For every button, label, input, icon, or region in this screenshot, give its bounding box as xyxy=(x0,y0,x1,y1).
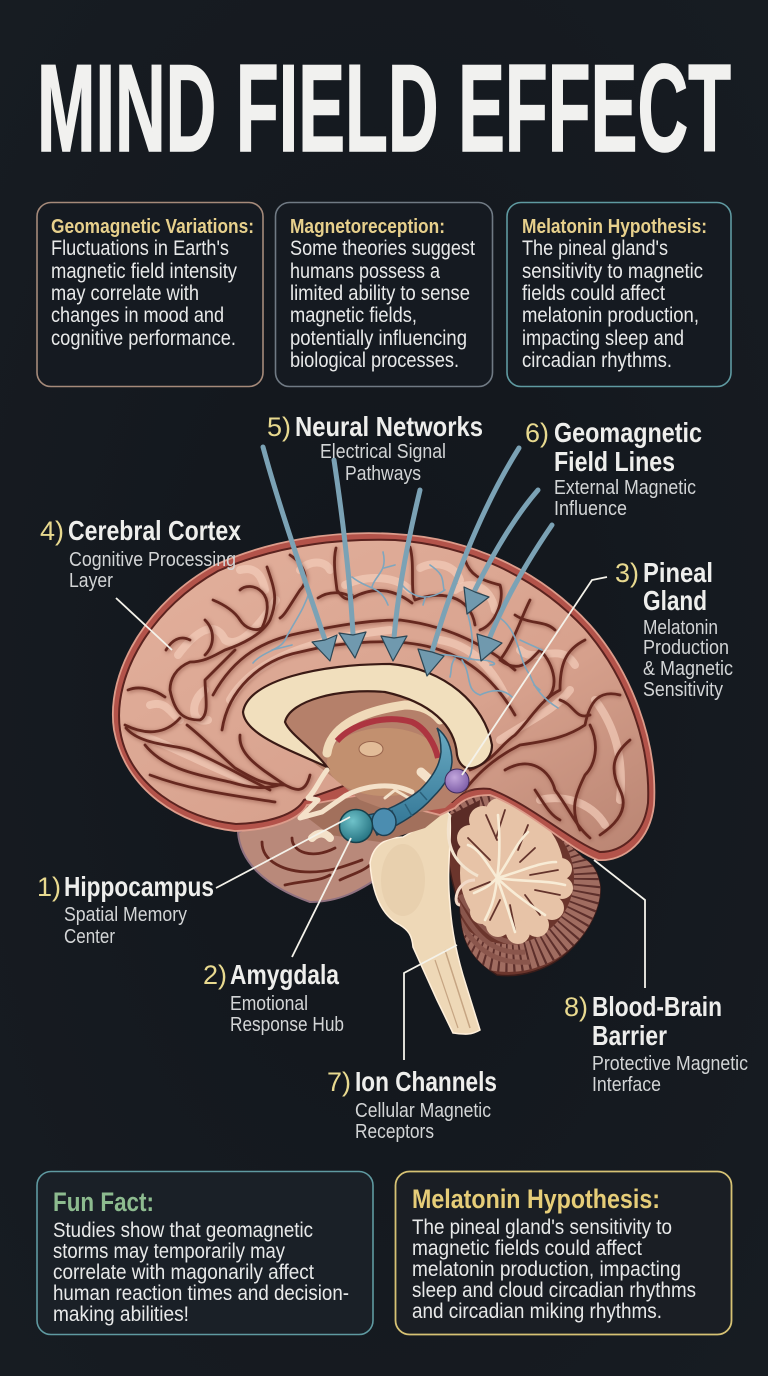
panel body: magnetoreception: Some theories suggest xyxy=(290,237,475,260)
panel heading: melatonin hypothesis top: Melatonin Hypothesis: xyxy=(522,215,707,238)
label 2: amygdala: Response Hub xyxy=(230,1014,344,1036)
label 8: blood-brain barrier: Blood-Brain xyxy=(592,991,722,1022)
panel body: geomagnetic variations xyxy=(51,237,237,350)
panel body: magnetoreception: biological processes. xyxy=(290,349,459,372)
leader line 7 xyxy=(404,945,457,1060)
neural branch lines xyxy=(253,552,558,708)
temporal lobe xyxy=(238,800,392,902)
panel body: melatonin hypothesis bottom: sleep and cloud circadian rhythms xyxy=(412,1279,696,1302)
label 6: geomagnetic field lines xyxy=(525,417,702,520)
label 4: cerebral cortex: Cerebral Cortex xyxy=(68,515,241,546)
panel: melatonin hypothesis top xyxy=(507,202,731,386)
panel body: melatonin hypothesis top: sensitivity to magnetic xyxy=(522,260,703,283)
panel body: fun fact: storms may temporarily may xyxy=(53,1240,285,1263)
leader line 8 xyxy=(594,860,645,988)
label 6: geomagnetic field lines: Geomagnetic xyxy=(554,417,702,448)
panel body: geomagnetic variations: cognitive performance. xyxy=(51,327,236,350)
leader line 2 xyxy=(292,838,351,957)
label 1: hippocampus: 1) xyxy=(37,872,61,902)
arrow 3 xyxy=(381,490,420,661)
label 8: blood-brain barrier: Protective Magnetic xyxy=(592,1053,748,1075)
panel body: melatonin hypothesis bottom: melatonin production, impacting xyxy=(412,1258,681,1281)
arbor vitae xyxy=(457,798,573,944)
panel body: fun fact: making abilities! xyxy=(53,1303,189,1326)
label 8: blood-brain barrier: 8) xyxy=(564,992,588,1022)
corpus callosum xyxy=(243,664,492,768)
panel body: melatonin hypothesis bottom: magnetic fields could affect xyxy=(412,1237,642,1260)
label 4: cerebral cortex: 4) xyxy=(40,516,64,546)
label 3: pineal gland: Sensitivity xyxy=(643,679,723,701)
label 3: pineal gland: Gland xyxy=(643,585,707,616)
panel body: magnetoreception xyxy=(290,237,475,372)
panel: magnetoreception xyxy=(276,202,492,386)
arrow 1 xyxy=(263,447,337,661)
panel body: melatonin hypothesis top: melatonin production, xyxy=(522,304,699,327)
label 3: pineal gland: & Magnetic xyxy=(643,658,733,680)
label 2: amygdala: Emotional xyxy=(230,993,308,1015)
label 6: geomagnetic field lines: External Magnetic xyxy=(554,477,696,499)
label 1: hippocampus: Center xyxy=(64,926,115,948)
label 1: hippocampus: Spatial Memory xyxy=(64,904,187,926)
cerebellum ribs xyxy=(428,798,588,962)
thalamus oval xyxy=(359,742,383,756)
arrows: geomagnetic field lines xyxy=(263,447,552,676)
panel body: melatonin hypothesis top: fields could affect xyxy=(522,282,665,305)
dark cavity beside arbor xyxy=(450,800,480,876)
panel body: magnetoreception: magnetic fields, xyxy=(290,304,417,327)
arrow 6 xyxy=(477,525,552,661)
inner brown region xyxy=(262,675,466,815)
arrow 2 xyxy=(334,460,366,658)
panel body: melatonin hypothesis bottom: and circadian miking rhythms. xyxy=(412,1300,662,1323)
panel body: geomagnetic variations: may correlate with xyxy=(51,282,199,305)
panel body: magnetoreception: humans possess a xyxy=(290,260,440,283)
label 4: cerebral cortex: Layer xyxy=(69,570,113,592)
arrow 5 xyxy=(464,490,538,614)
panel heading: fun fact: Fun Fact: xyxy=(53,1187,154,1217)
leader line 3 xyxy=(462,577,607,775)
cortex sulci xyxy=(125,547,630,838)
panel heading: melatonin hypothesis bottom: Melatonin Hypothesis: xyxy=(412,1184,660,1214)
panel: geomagnetic variations xyxy=(37,202,263,386)
label 6: geomagnetic field lines: 6) xyxy=(525,418,549,448)
label 5: neural networks xyxy=(267,411,483,485)
panel body: melatonin hypothesis bottom xyxy=(412,1216,696,1323)
cerebrum outer rim xyxy=(113,533,654,860)
label 5: neural networks: Pathways xyxy=(345,463,421,485)
label 7: ion channels: Receptors xyxy=(355,1121,434,1143)
label 5: neural networks: Electrical Signal xyxy=(320,441,446,463)
pineal gland ball xyxy=(445,769,469,793)
label 8: blood-brain barrier: Barrier xyxy=(592,1020,667,1051)
label 2: amygdala: Amygdala xyxy=(230,959,339,990)
label 3: pineal gland: Pineal xyxy=(643,557,713,588)
panel body: magnetoreception: limited ability to sense xyxy=(290,282,470,305)
hippocampus bead xyxy=(340,810,372,842)
panel body: magnetoreception: potentially influencing xyxy=(290,327,467,350)
label 4: cerebral cortex xyxy=(40,515,241,592)
cream white-matter strands xyxy=(300,770,430,838)
cerebellum xyxy=(450,796,601,976)
label 2: amygdala: 2) xyxy=(203,960,227,990)
label 3: pineal gland: 3) xyxy=(615,558,639,588)
panel body: melatonin hypothesis top: The pineal gland's xyxy=(522,237,668,260)
brown fill between frontal and temporal lobes xyxy=(300,770,460,842)
panel body: geomagnetic variations: changes in mood and xyxy=(51,304,224,327)
label 4: cerebral cortex: Cognitive Processing xyxy=(69,549,236,571)
panel heading: magnetoreception: Magnetoreception: xyxy=(290,215,445,238)
panel body: melatonin hypothesis top: circadian rhythms. xyxy=(522,349,672,372)
label 7: ion channels xyxy=(327,1066,497,1143)
panel body: melatonin hypothesis top: impacting sleep and xyxy=(522,327,684,350)
choroid red band xyxy=(337,719,438,758)
panel body: fun fact xyxy=(53,1219,349,1326)
panel body: fun fact: human reaction times and decision- xyxy=(53,1282,349,1305)
brain stem xyxy=(370,803,480,1034)
label 3: pineal gland xyxy=(615,557,733,701)
leader line 4 xyxy=(116,598,172,650)
panel body: geomagnetic variations: Fluctuations in Earth's xyxy=(51,237,229,260)
label 3: pineal gland: Production xyxy=(643,637,729,659)
brain illustration xyxy=(113,533,654,1034)
label 2: amygdala xyxy=(203,959,344,1036)
panel body: fun fact: correlate with magonarily affect xyxy=(53,1261,314,1284)
panel: fun fact xyxy=(37,1172,373,1334)
label 7: ion channels: Cellular Magnetic xyxy=(355,1100,491,1122)
arrow 4 xyxy=(418,448,519,676)
label 1: hippocampus: Hippocampus xyxy=(64,871,214,902)
label 6: geomagnetic field lines: Field Lines xyxy=(554,446,675,477)
label 7: ion channels: 7) xyxy=(327,1067,351,1097)
panel: melatonin hypothesis bottom xyxy=(396,1172,732,1334)
panel body: geomagnetic variations: magnetic field intensity xyxy=(51,260,237,283)
label 8: blood-brain barrier: Interface xyxy=(592,1074,661,1096)
hippocampus tube xyxy=(340,728,452,842)
label 8: blood-brain barrier xyxy=(564,991,748,1096)
label 5: neural networks: Neural Networks xyxy=(295,411,483,442)
cerebral cortex xyxy=(119,540,648,852)
panel body: melatonin hypothesis bottom: The pineal gland's sensitivity to xyxy=(412,1216,672,1239)
fornix xyxy=(327,705,440,753)
panel heading: geomagnetic variations: Geomagnetic Variations: xyxy=(51,215,254,238)
label 3: pineal gland: Melatonin xyxy=(643,617,718,639)
panel body: fun fact: Studies show that geomagnetic xyxy=(53,1219,313,1242)
leader line 1 xyxy=(216,817,350,888)
label 6: geomagnetic field lines: Influence xyxy=(554,498,627,520)
cortex highlights xyxy=(140,562,621,825)
label 7: ion channels: Ion Channels xyxy=(355,1066,497,1097)
panel body: melatonin hypothesis top xyxy=(522,237,703,372)
label 1: hippocampus xyxy=(37,871,214,948)
label 5: neural networks: 5) xyxy=(267,412,291,442)
